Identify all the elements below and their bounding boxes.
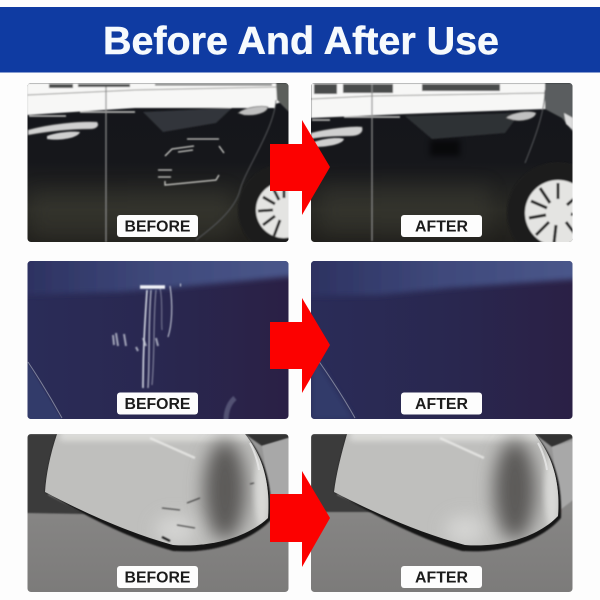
label: before row 1 [117,215,198,237]
panel: car door after [311,83,572,242]
title banner [0,7,600,72]
scratches [162,483,254,541]
label: before row 2 [117,392,198,414]
label: before row 1: BEFORE [124,218,191,236]
panel: car door before [28,83,288,242]
label: before row 3: BEFORE [124,570,191,586]
label: after row 3: AFTER [415,570,468,586]
title text: Before And After Use [103,20,499,63]
label: after row 1: AFTER [415,218,468,236]
panel: silver mirror before [27,425,289,592]
panel: blue paint after [305,255,578,420]
panel: silver mirror after [311,425,573,592]
label: after row 2 [401,392,482,414]
arrow: row 1 [270,120,330,215]
label: after row 3 [401,566,482,588]
label: before row 2: BEFORE [124,396,191,413]
scratches [113,285,235,420]
label: after row 2: AFTER [415,396,468,413]
mirror body [45,434,268,546]
label: after row 1 [401,215,482,237]
label: before row 3 [117,566,198,588]
mirror body [334,434,558,546]
arrow: row 3 [270,471,330,567]
arrow: row 2 [270,298,330,393]
panel: blue paint before [20,255,295,420]
